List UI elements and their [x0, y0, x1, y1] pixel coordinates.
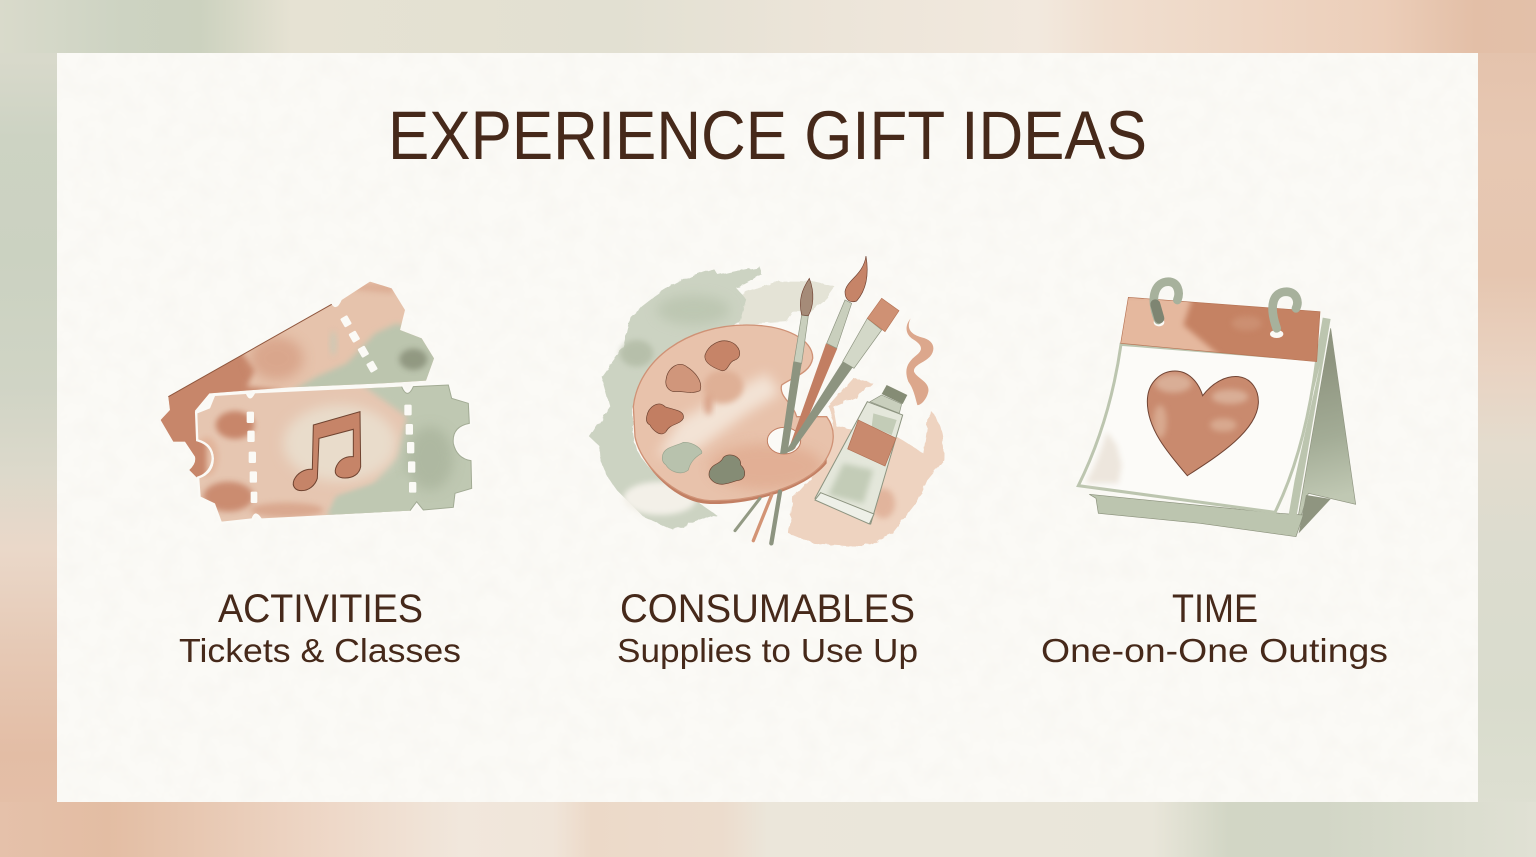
brushes — [780, 256, 899, 454]
main page — [1078, 344, 1317, 512]
subheading: time: One-on-One Outings — [1041, 633, 1388, 670]
lower pages — [1089, 494, 1303, 537]
heart — [1143, 368, 1263, 478]
title: EXPERIENCE GIFT IDEAS — [388, 97, 1147, 174]
header band — [1117, 295, 1323, 365]
subheading: consumables: Supplies to Use Up — [617, 633, 918, 670]
icon: music note — [293, 412, 361, 491]
paint tube — [815, 385, 907, 524]
binding rings — [1154, 282, 1297, 338]
heading: activities: ACTIVITIES — [218, 587, 423, 631]
column: consumables — [617, 587, 918, 670]
column: time — [1041, 587, 1388, 670]
icon: paint palette with brushes and tube — [589, 256, 943, 547]
green watercolor wash — [589, 267, 762, 530]
column: activities — [179, 587, 461, 670]
palette shadow — [635, 437, 827, 504]
paint blobs — [646, 341, 745, 484]
pale green wash — [740, 282, 835, 325]
page edge — [1291, 318, 1327, 527]
icon: desk calendar with heart — [1078, 282, 1356, 537]
brush handles below palette — [735, 492, 780, 543]
calendar back stand — [1295, 328, 1356, 535]
page stain — [1085, 432, 1122, 483]
palette body — [630, 322, 840, 505]
heading: consumables: CONSUMABLES — [620, 587, 915, 631]
front ticket — [193, 380, 477, 527]
icon: concert tickets — [153, 277, 477, 527]
orange stroke wash — [906, 318, 933, 405]
subheading: activities: Tickets & Classes — [179, 633, 461, 670]
heading: time: TIME — [1172, 587, 1258, 631]
peach watercolor wash — [788, 378, 943, 547]
back ticket — [153, 277, 440, 483]
